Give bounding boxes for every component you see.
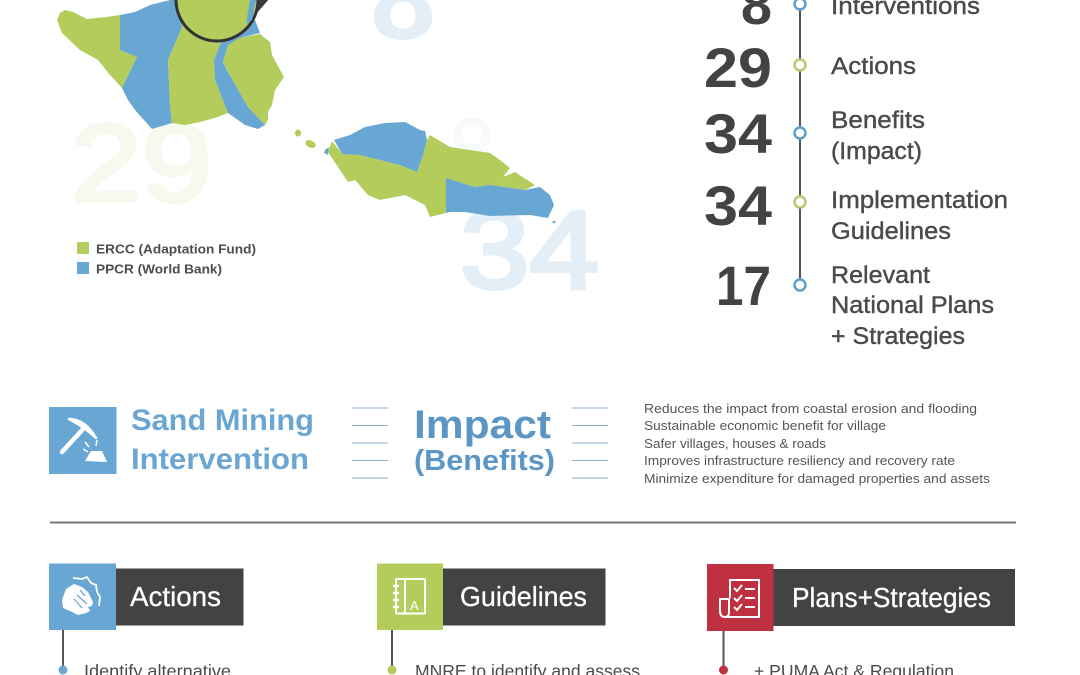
timeline of counts: 17 [716, 254, 771, 317]
timeline of counts: (Impact) [831, 138, 922, 165]
heading: Impact (Benefits) [414, 403, 555, 477]
timeline of counts: Benefits [831, 107, 925, 134]
benefits list [644, 401, 991, 486]
icon: notebook: A [410, 598, 419, 613]
arrows left [352, 408, 388, 478]
timeline of counts: 34 [704, 102, 772, 165]
benefits list: Improves infrastructure resiliency and recovery rate [644, 453, 955, 468]
heading: Sand Mining Intervention [131, 404, 314, 476]
heading: Sand Mining Intervention: Intervention [131, 443, 309, 476]
map: magnifier [176, 0, 270, 41]
card: Guidelines: Guidelines [460, 581, 587, 612]
map: eastern island [295, 122, 556, 224]
timeline of counts: Guidelines [831, 218, 951, 245]
card: Guidelines [377, 564, 640, 675]
timeline of counts: + Strategies [831, 323, 965, 350]
arrows right [572, 408, 608, 478]
legend [77, 242, 256, 276]
benefits list: Safer villages, houses & roads [644, 436, 827, 451]
timeline of counts: 34 [704, 174, 772, 237]
timeline of counts: 29 [704, 36, 772, 99]
icon: pickaxe on rock [49, 407, 116, 474]
benefits list: Reduces the impact from coastal erosion and flooding [644, 401, 977, 416]
map: western island [57, 0, 284, 129]
card: Actions [49, 564, 244, 675]
ghost number 34: 34 [460, 189, 599, 312]
benefits list: Sustainable economic benefit for village [644, 418, 886, 433]
icon: fist [62, 577, 100, 615]
timeline of counts: Relevant [831, 262, 930, 289]
legend: PPCR (World Bank) [96, 262, 222, 276]
heading: Impact (Benefits): (Benefits) [414, 445, 555, 477]
legend: ERCC (Adaptation Fund) [96, 242, 256, 256]
ghost number 29: 29 [71, 102, 212, 225]
card: Plans+Strategies: Plans+Strategies [792, 582, 991, 613]
card: Plans+Strategies [707, 564, 1015, 675]
icon: notebook [393, 579, 425, 614]
timeline of counts [704, 0, 1008, 350]
ghost number 8 faint: 8 [449, 102, 495, 196]
card: Actions: Actions [130, 581, 221, 612]
timeline of counts: Implementation [831, 187, 1008, 214]
timeline of counts: Actions [831, 53, 916, 80]
timeline of counts: National Plans [831, 292, 994, 319]
icon: checklist document [720, 580, 759, 617]
benefits list: Minimize expenditure for damaged properties and assets [644, 471, 991, 486]
heading: Sand Mining Intervention: Sand Mining [131, 404, 314, 437]
heading: Impact (Benefits): Impact [414, 403, 551, 447]
